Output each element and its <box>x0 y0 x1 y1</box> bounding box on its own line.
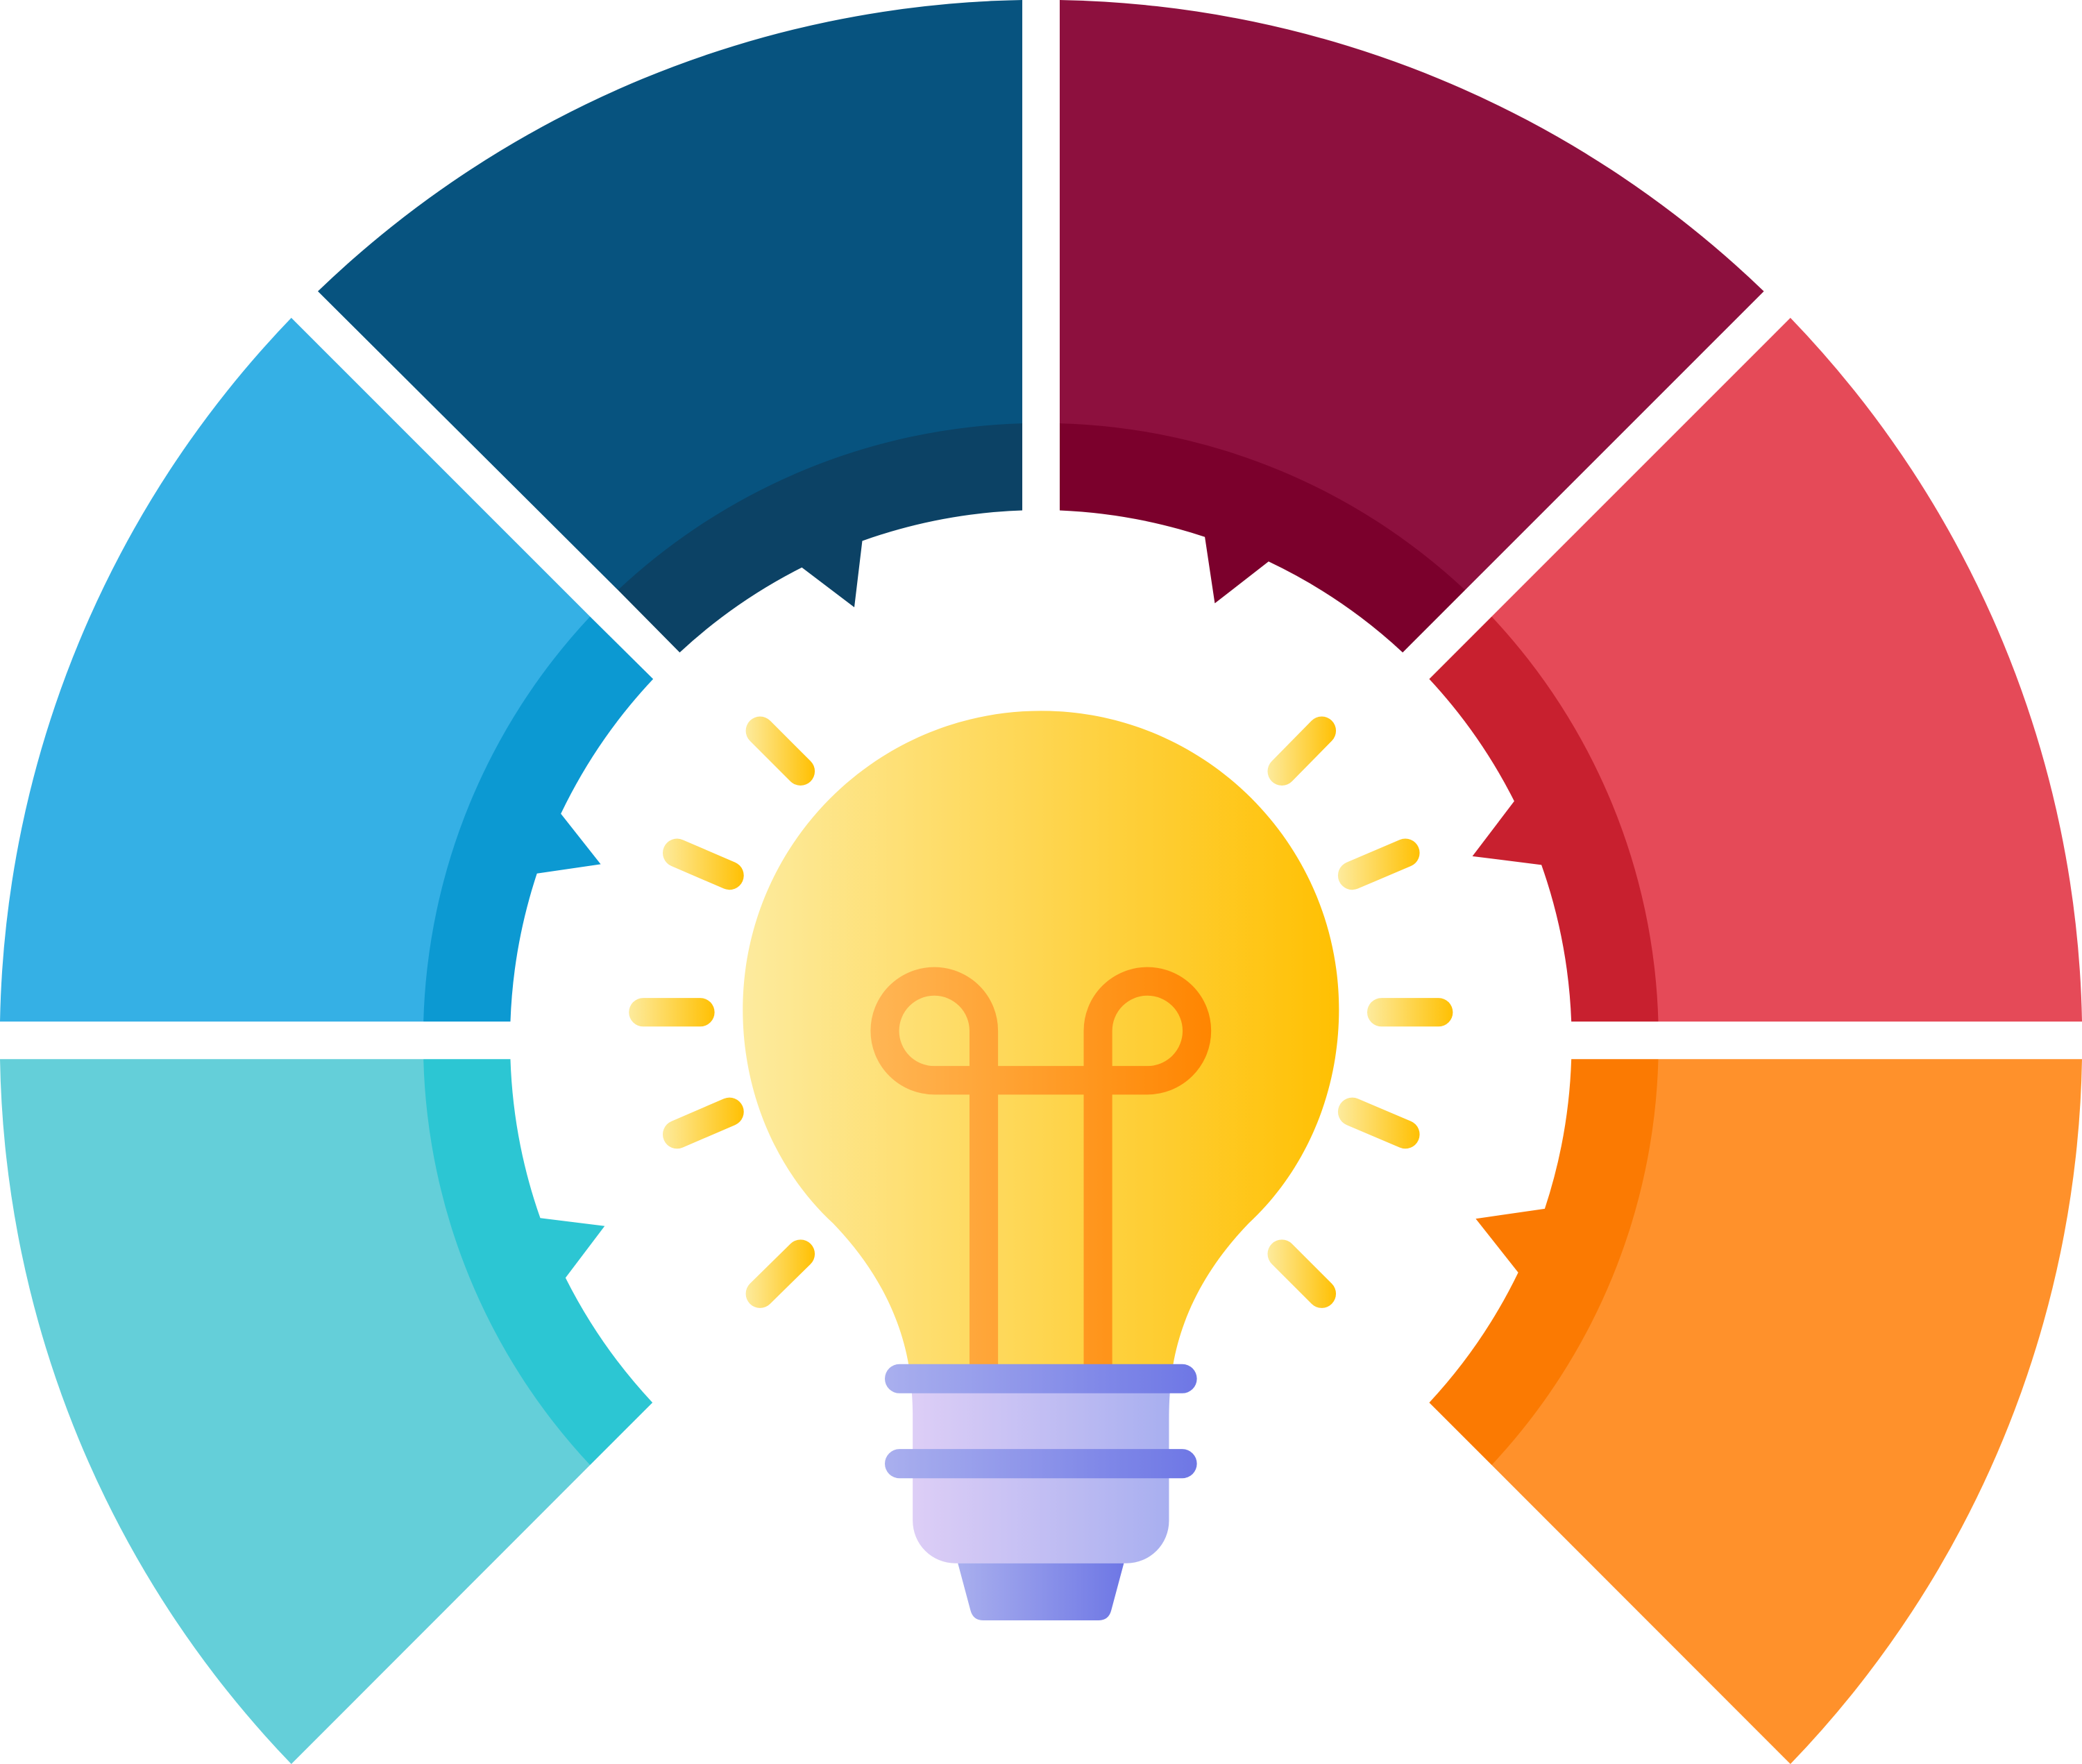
panel: bottom-right segment <box>1429 1059 2082 1764</box>
panel: top-left segment <box>318 0 1022 652</box>
panel: right segment <box>1429 318 2082 1021</box>
cap band upper <box>885 1364 1197 1393</box>
panel: top-right segment <box>1060 0 1764 652</box>
bulb cap <box>911 1388 1170 1563</box>
panel: left segment <box>0 318 653 1021</box>
bulb tip <box>958 1563 1124 1620</box>
icon: light rays <box>643 731 1439 1294</box>
bulb filament <box>885 981 1197 1368</box>
icon: light bulb <box>743 711 1339 1620</box>
panel: bottom-left segment <box>0 1059 652 1764</box>
bulb glass <box>743 711 1339 1366</box>
cap band lower <box>885 1449 1197 1478</box>
